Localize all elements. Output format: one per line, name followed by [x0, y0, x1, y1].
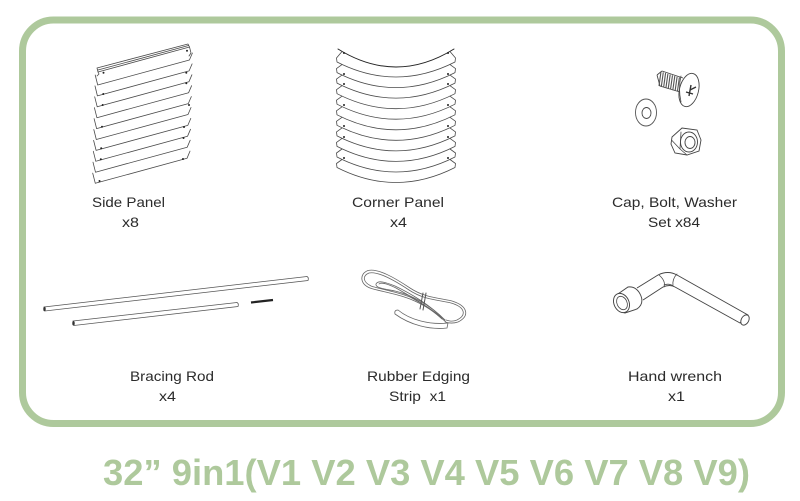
icon: washer [636, 99, 656, 126]
label: rubber edging strip: Rubber Edging [367, 368, 470, 384]
label: hand wrench: x1 [668, 388, 685, 404]
icon: bolt [657, 71, 702, 109]
icon: hand wrench [610, 272, 751, 327]
label: corner panel: Corner Panel [352, 194, 444, 210]
label: side panel: Side Panel [92, 194, 165, 210]
icon: side panel [93, 44, 192, 183]
label: side panel: x8 [122, 214, 139, 230]
icon: cap bolt washer set [636, 71, 702, 155]
label: cap bolt washer: Set x84 [648, 214, 700, 230]
icon: bracing rods [43, 276, 308, 326]
label: bracing rod [130, 368, 214, 404]
label: side panel [92, 194, 165, 230]
label: rubber edging strip [367, 368, 470, 404]
icon: nut [671, 128, 701, 155]
label: hand wrench: Hand wrench [628, 368, 722, 384]
label: rubber edging strip: Strip x1 [389, 388, 446, 404]
label: cap bolt washer: Cap, Bolt, Washer [612, 194, 737, 210]
icon: rubber edging strip [362, 270, 466, 328]
icon: corner panel [336, 49, 456, 182]
label: cap bolt washer [612, 194, 737, 230]
panel: parts frame [22, 20, 782, 424]
label: corner panel: x4 [390, 214, 407, 230]
label: bracing rod: Bracing Rod [130, 368, 214, 384]
icon: threaded rod [251, 300, 273, 302]
label: bracing rod: x4 [159, 388, 176, 404]
label: hand wrench [628, 368, 722, 404]
label: corner panel [352, 194, 444, 230]
title: 32” 9in1(V1 V2 V3 V4 V5 V6 V7 V8 V9) [103, 452, 750, 493]
